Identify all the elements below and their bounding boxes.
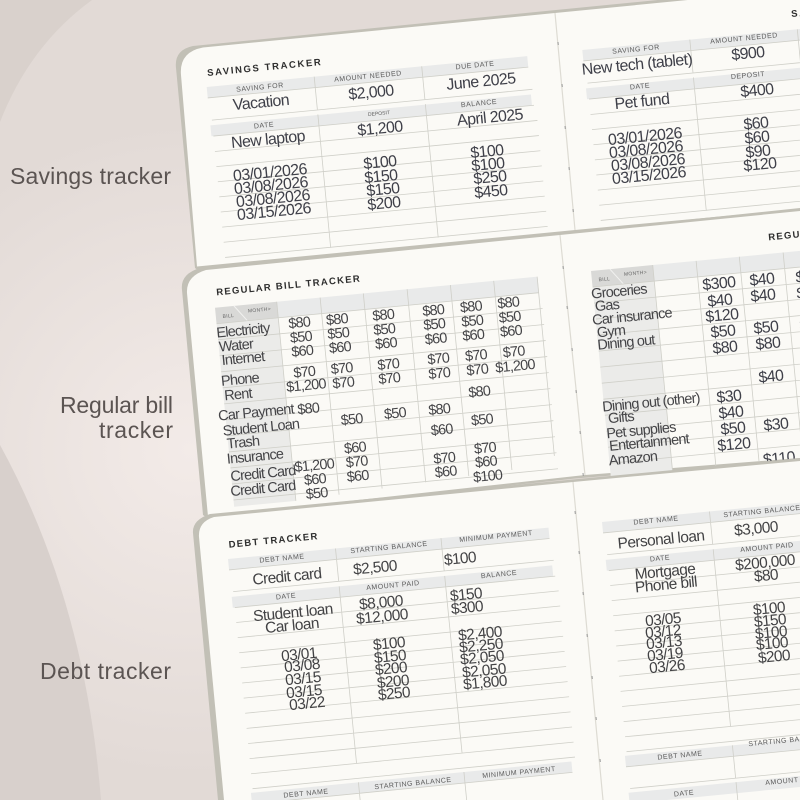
debt left text: $12,000 (355, 606, 410, 628)
bill left text: $80 (422, 302, 446, 320)
page: bill right table (591, 240, 800, 486)
bill right text: Dining out (597, 332, 656, 354)
bill left text: $60 (374, 335, 398, 353)
bill right text: $40 (758, 367, 785, 387)
bill right text: Car insurance (591, 305, 673, 329)
debt right text: 03/13 (645, 633, 683, 653)
bill left text: $80 (288, 314, 312, 332)
page: savings right table (582, 19, 800, 221)
bill right text: $300 (702, 274, 737, 294)
label: savings tracker: Savings tracker (10, 163, 171, 189)
bill left text: $80 (297, 400, 321, 418)
debt left text: $250 (377, 684, 412, 704)
bill left text: $60 (474, 453, 498, 471)
bill left text: Insurance (226, 446, 285, 468)
bill left text: $80 (325, 311, 349, 329)
bill left text: $50 (498, 309, 522, 327)
bill left text: $1,200 (495, 357, 536, 377)
bill right text: $40 (707, 291, 734, 311)
bill left text: $60 (303, 471, 327, 489)
left table text: $250 (473, 168, 508, 188)
bill right text: Pet supplies (606, 420, 677, 442)
page: savings left table (207, 56, 548, 258)
bill left text: Rent (224, 386, 253, 404)
bill left text: $50 (327, 325, 351, 343)
debt left text: $150 (373, 647, 408, 667)
debt right text: DEBT NAME (633, 515, 679, 527)
bill right text: $120 (717, 435, 752, 455)
right table text: 03/15/2026 (611, 164, 687, 188)
bill left text: $60 (499, 323, 523, 341)
left table text: $150 (364, 167, 399, 187)
bill left text: $60 (462, 327, 486, 345)
page: bill left table: BILL (222, 313, 234, 320)
debt right text: AMOUNT PAID (740, 542, 794, 554)
bill left text: $60 (424, 330, 448, 348)
bill left text: $50 (305, 485, 329, 503)
right table text: 03/01/2026 (607, 125, 683, 149)
debt right text: Mortgage (634, 561, 696, 583)
debt right text: $80 (753, 566, 780, 586)
bill left text: Credit Card (230, 463, 297, 485)
bill left text: $70 (377, 356, 401, 374)
bill left text: $1,200 (286, 376, 327, 396)
right table text: DEPOSIT (731, 71, 766, 81)
debt left text: STARTING BALANCE (374, 777, 452, 791)
left table text: $1,200 (357, 118, 404, 140)
debt right text: 03/05 (644, 610, 682, 630)
debt left text: DATE (276, 593, 296, 601)
debt right text: DATE (674, 790, 694, 798)
bill right text: $40 (750, 286, 777, 306)
bill right text (591, 219, 800, 469)
bill right text: $80 (712, 338, 739, 358)
bill left text: $70 (433, 450, 457, 468)
debt left text: $8,000 (358, 592, 405, 614)
left table text: DEPOSIT (368, 110, 390, 118)
left table text: BALANCE (461, 99, 497, 109)
label: regular bill tracker: Regular bill (60, 392, 173, 418)
left table text: SAVING FOR (236, 82, 284, 94)
right table text: $900 (731, 44, 766, 64)
bill left text: Internet (221, 349, 266, 369)
left table text: $100 (471, 155, 506, 175)
page: bill right table: MONTH> (624, 270, 647, 278)
bill right text: Amazon (608, 449, 659, 469)
label: regular bill tracker (60, 392, 173, 443)
debt left text: 03/08 (283, 656, 321, 676)
debt right text: DEBT NAME (657, 750, 703, 762)
page: bill right table: BILL (598, 276, 610, 283)
left table text: DATE (254, 122, 274, 130)
debt left text: Car loan (264, 615, 320, 637)
right table text: $120 (743, 155, 778, 175)
label: debt tracker: Debt tracker (40, 658, 171, 684)
debt left text: $2,050 (461, 660, 508, 682)
bill left text: $50 (383, 405, 407, 423)
bill right text: $110 (762, 449, 796, 469)
bill left text: $50 (470, 411, 494, 429)
bill left text: Car Payment (217, 401, 295, 425)
right table text: $60 (743, 114, 770, 134)
bill left text: $70 (345, 453, 369, 471)
left table text: New laptop (230, 128, 306, 152)
bill left text: $50 (340, 411, 364, 429)
bill left text: $60 (346, 468, 370, 486)
bill right text: $40 (718, 403, 745, 423)
debt left text: $300 (450, 598, 485, 618)
left table text: 03/08/2026 (233, 174, 309, 198)
bill right text: $50 (720, 419, 747, 439)
bill right text: $120 (705, 306, 740, 326)
bill left text: $70 (464, 347, 488, 365)
debt left text: DEBT NAME (259, 553, 305, 565)
bill left text: $50 (461, 313, 485, 331)
bill left text: $50 (423, 316, 447, 334)
notebook: savings tracker (176, 0, 800, 272)
right table text: DATE (630, 83, 650, 91)
left table text: 03/08/2026 (235, 187, 311, 211)
bill left text: Electricity (216, 320, 272, 342)
left table text: Vacation (232, 92, 290, 114)
bill right text: $30 (716, 387, 743, 407)
debt right text: Personal loan (617, 527, 705, 553)
debt left text: $2,250 (458, 635, 505, 657)
debt left text: DEBT NAME (283, 788, 329, 800)
right table text: Pet fund (614, 91, 670, 113)
right table text: 03/08/2026 (610, 151, 686, 175)
bill left text: $50 (289, 329, 313, 347)
debt left text: MINIMUM PAYMENT (459, 530, 533, 544)
left table text: $450 (474, 182, 509, 202)
left table text: $150 (366, 180, 401, 200)
bill left text: $70 (502, 343, 526, 361)
bill left text: $70 (293, 364, 317, 382)
page: bill left table: MONTH> (248, 306, 271, 315)
debt left text: STARTING BALANCE (350, 541, 428, 555)
bill left text: $60 (328, 339, 352, 357)
bill right text: Gym (596, 323, 627, 341)
left table text: $2,000 (348, 82, 395, 104)
debt left text: Credit card (252, 565, 322, 589)
bill left text: $80 (497, 294, 521, 312)
left table text: June 2025 (446, 70, 517, 94)
debt right text: 03/19 (646, 645, 684, 665)
bill left text: $70 (466, 361, 490, 379)
bill left text: $1,200 (294, 456, 335, 476)
bill left text: $60 (430, 421, 454, 439)
debt right text (617, 505, 800, 798)
left table text: DUE DATE (455, 61, 495, 71)
bill left text: $80 (428, 401, 452, 419)
bill left text: $70 (473, 440, 497, 458)
bill left text: $80 (372, 307, 396, 325)
notebook: regular bill tracker (182, 208, 800, 518)
debt right text: $200 (757, 647, 792, 667)
debt right text: $100 (754, 623, 789, 643)
right table text: $90 (745, 142, 772, 162)
bill left text: $50 (373, 321, 397, 339)
bill right text: Gas (594, 297, 620, 315)
label: regular bill tracker: tracker (99, 417, 173, 443)
right table text: SAVING FOR (612, 44, 660, 56)
left table text: April 2025 (456, 106, 524, 130)
bill right text: $50 (710, 322, 737, 342)
bill left text: Student Loan (222, 416, 301, 440)
debt left text: MINIMUM PAYMENT (482, 766, 556, 780)
right table text: New tech (tablet) (581, 51, 693, 79)
left table text: 03/15/2026 (236, 200, 312, 224)
bill left text: Water (218, 336, 255, 356)
debt right text: $200,000 (734, 552, 797, 574)
page: bill left table (215, 276, 559, 507)
bill left text: $70 (427, 350, 451, 368)
bill right text: Entertainment (608, 431, 690, 455)
bill left text: $80 (459, 298, 483, 316)
bill left text: $60 (434, 463, 458, 481)
bill right text: Dining out (other) (602, 390, 700, 416)
bill left text: $60 (291, 343, 315, 361)
right table text: 03/08/2026 (608, 138, 684, 162)
left table text: 03/01/2026 (232, 161, 308, 185)
debt left text: 03/15 (284, 669, 322, 689)
bill left text: $70 (378, 370, 402, 388)
debt left text: $2,400 (457, 623, 504, 645)
debt left text: $1,800 (462, 672, 509, 694)
bill left text: $70 (332, 374, 356, 392)
heading: debt tracker: DEBT TRACKER (228, 531, 318, 551)
debt left text: $100 (372, 634, 407, 654)
right table text (581, 0, 800, 188)
bill left text: Phone (220, 370, 260, 390)
debt right text: $100 (755, 634, 790, 654)
debt right text: $3,000 (733, 518, 780, 540)
bill left text (216, 294, 536, 503)
bill right text: $30 (763, 415, 790, 435)
bill left text: Credit Card (230, 478, 297, 500)
heading: savings tracker: SAVINGS TRACKER (207, 57, 321, 79)
debt left text: 03/01 (280, 645, 318, 665)
bill left text: $100 (472, 467, 504, 486)
debt left text: $2,500 (352, 557, 399, 579)
left table text: AMOUNT NEEDED (334, 70, 402, 84)
bill right text: $50 (753, 318, 780, 338)
debt right text: 03/26 (648, 657, 686, 677)
notebook: debt tracker (193, 458, 800, 800)
debt left text: $200 (376, 672, 411, 692)
debt left text: Student loan (252, 601, 334, 625)
bill right text: $80 (755, 334, 782, 354)
debt right text: $150 (753, 611, 788, 631)
debt right text: DATE (650, 555, 670, 563)
bill right text: Groceries (591, 281, 648, 303)
bill left text: $60 (343, 439, 367, 457)
left table text: $100 (363, 153, 398, 173)
bill right text: $40 (749, 270, 776, 290)
bill left text: $70 (428, 365, 452, 383)
debt right text: 03/12 (644, 622, 682, 642)
debt right text: STARTING BALANCE (723, 505, 800, 519)
bill left text: Trash (226, 433, 261, 453)
debt left text: $2,050 (459, 647, 506, 669)
debt left text: 03/22 (288, 694, 326, 714)
debt left text: BALANCE (481, 570, 517, 580)
left table text (230, 61, 524, 224)
right table text: $400 (740, 81, 775, 101)
bill left text: $80 (468, 383, 492, 401)
debt left text: $100 (443, 549, 478, 569)
page: debt right table (602, 490, 800, 800)
right table text: AMOUNT NEEDED (710, 32, 778, 46)
right table text: $60 (744, 128, 771, 148)
debt left text: AMOUNT PAID (366, 580, 420, 592)
debt right text: $100 (752, 599, 787, 619)
heading: regular bill tracker: REGULAR BILL TRACKER (216, 274, 360, 298)
debt right text: Phone bill (634, 574, 698, 596)
left table text: $200 (367, 194, 402, 214)
page: debt left table (228, 527, 579, 800)
debt left text: 03/15 (285, 682, 323, 702)
bill left text: $70 (330, 360, 354, 378)
debt left text: $150 (449, 585, 484, 605)
debt left text: $200 (374, 659, 409, 679)
left table text: $100 (470, 142, 505, 162)
debt left text (252, 530, 556, 800)
bill right text: Gifts (607, 409, 635, 427)
